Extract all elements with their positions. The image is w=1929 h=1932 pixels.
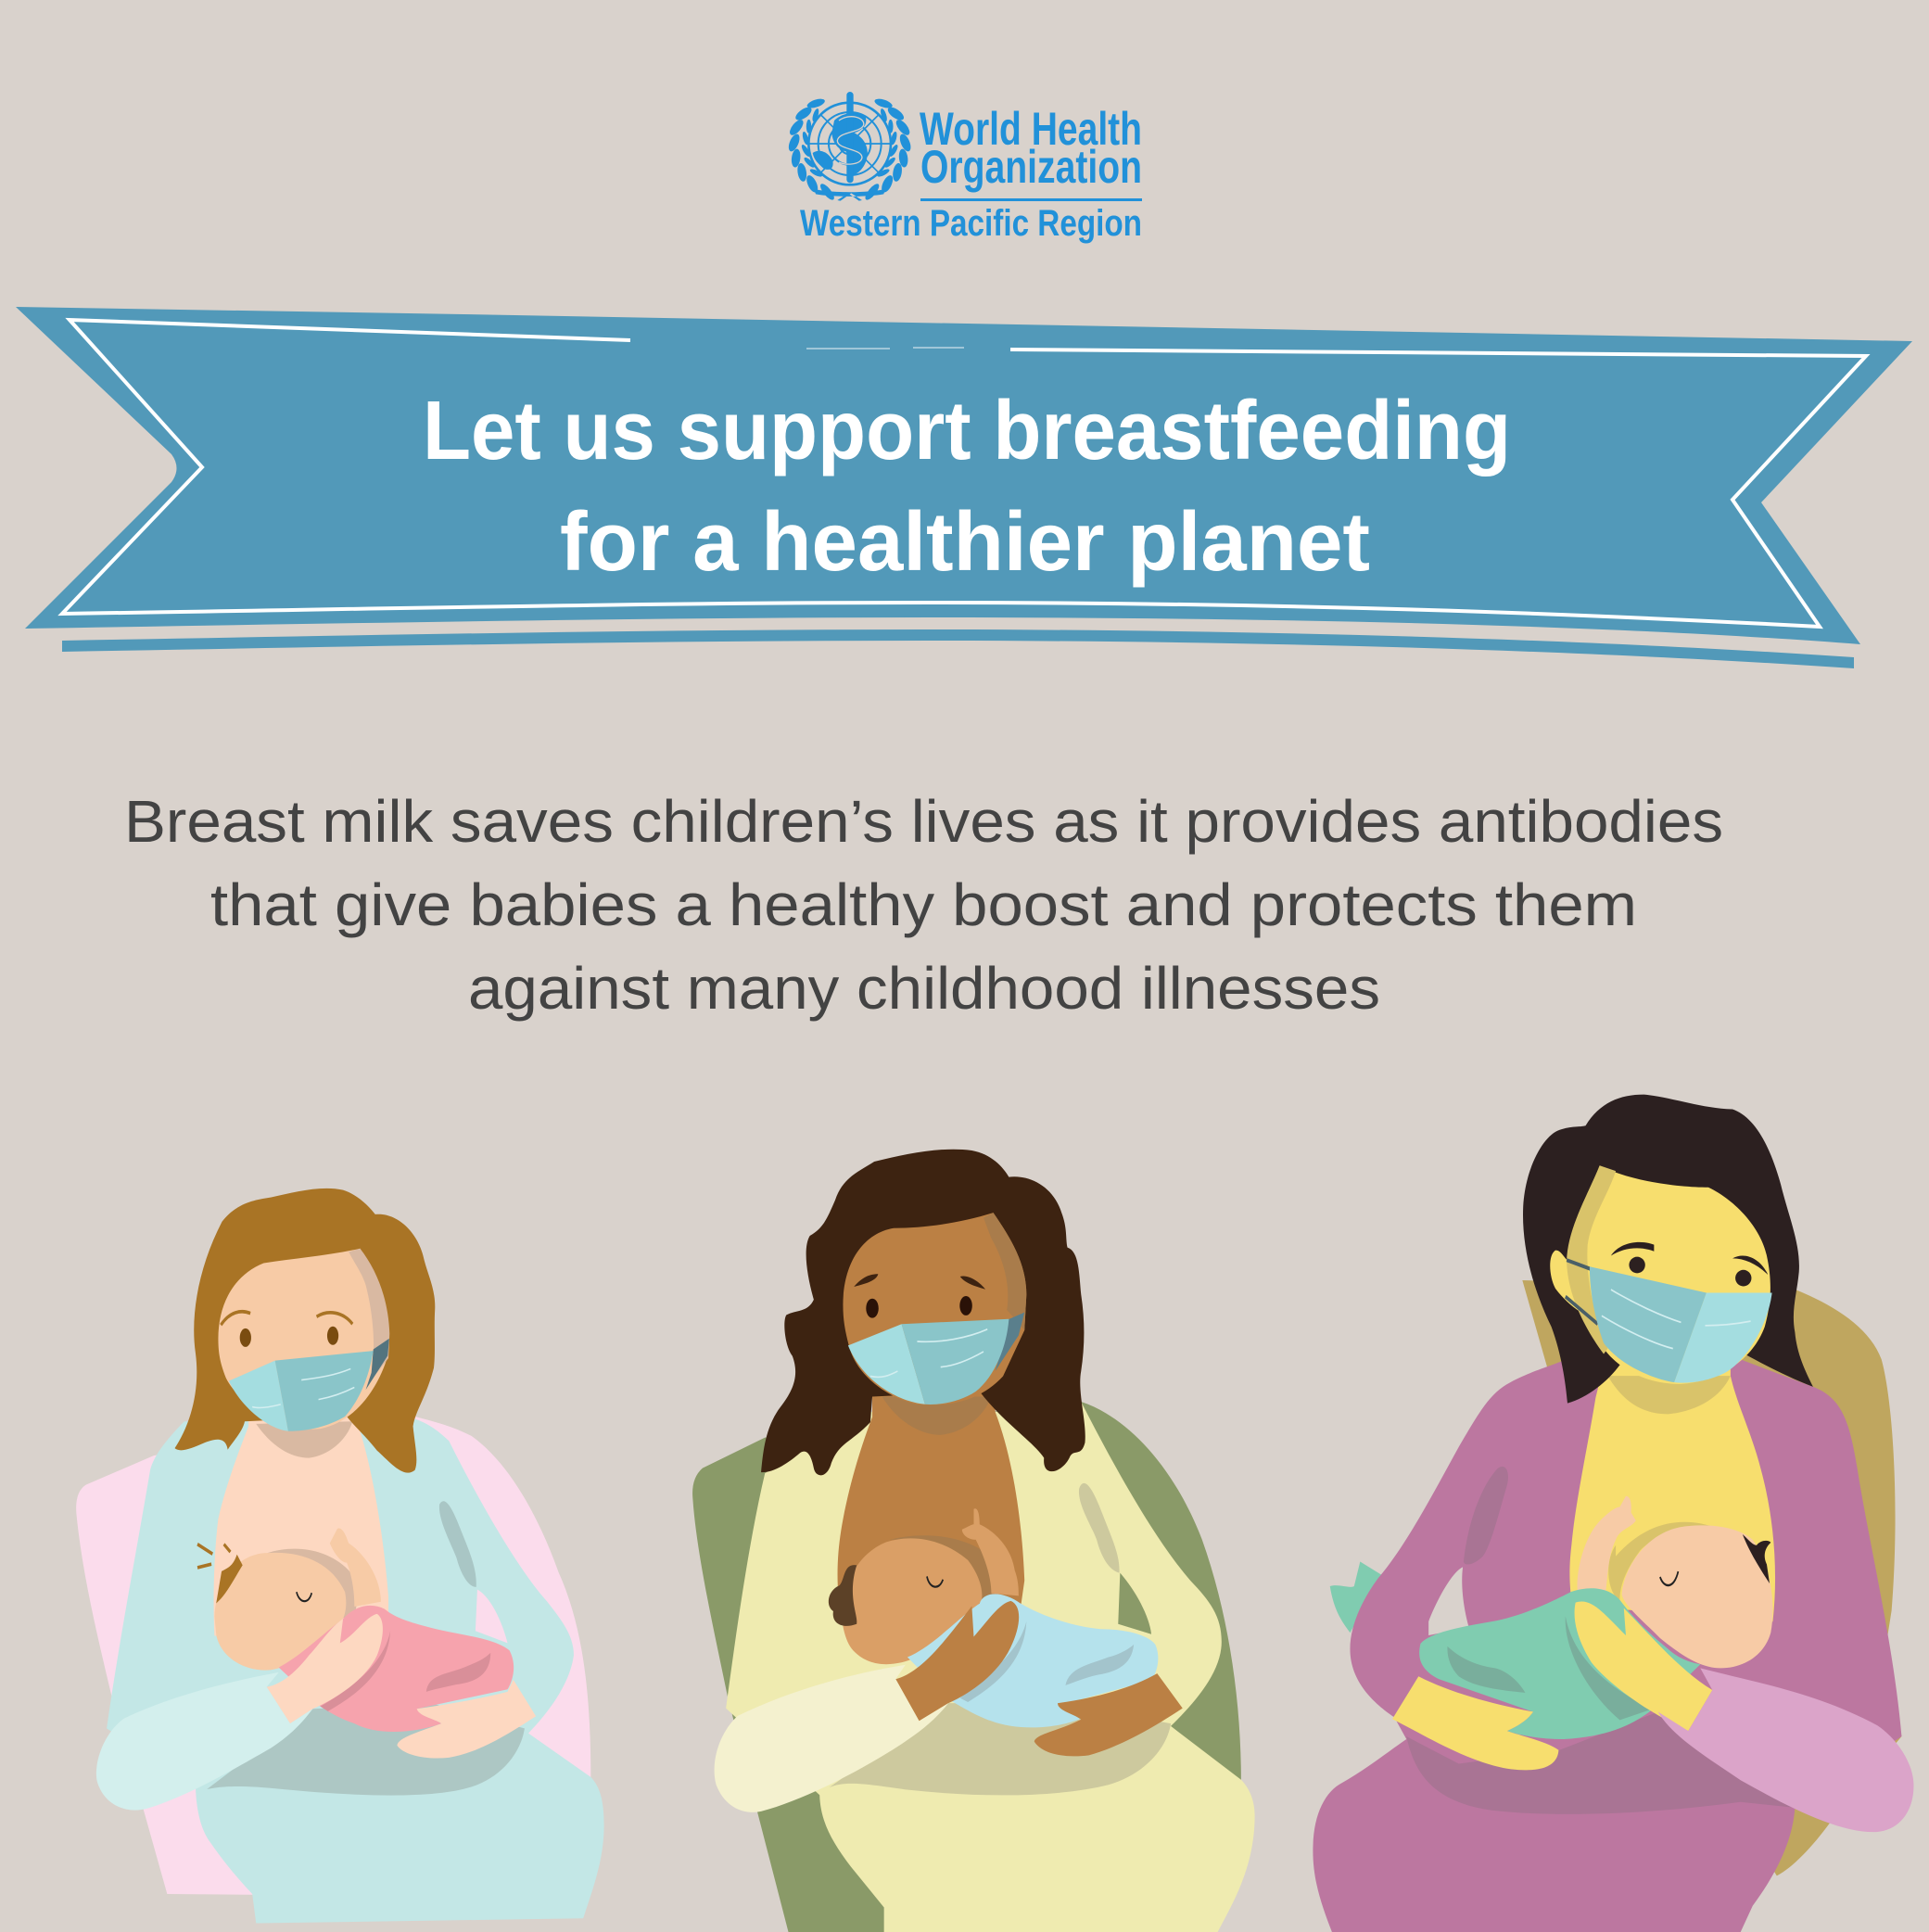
mint cardigan and lap [107, 1419, 604, 1924]
body text: Breast milk saves children’s lives as it provides antibodies [124, 788, 1723, 855]
baby [197, 1529, 514, 1732]
green chair [692, 1402, 1241, 1932]
banner [16, 307, 1912, 668]
pink chair [76, 1417, 590, 1897]
logo text: World Health: World Health [920, 103, 1142, 155]
head [1523, 1095, 1813, 1404]
banner title: for a healthier planet [560, 496, 1370, 589]
mustard chair [1522, 1280, 1901, 1875]
icon: WHO emblem [786, 92, 913, 202]
logo text: Organization: Organization [920, 141, 1142, 193]
lap shadow [830, 1703, 1171, 1795]
WHO Western Pacific Region logo [786, 92, 1142, 244]
logo text: Western Pacific Region: Western Pacific Region [800, 203, 1142, 244]
hands and sleeve [1392, 1602, 1913, 1832]
face mask [848, 1313, 1024, 1405]
blanket tail [1330, 1561, 1382, 1633]
illustration: mother 3, black hair, purple cardigan [1313, 1095, 1913, 1932]
banner underline [62, 629, 1854, 668]
body text: against many childhood illnesses [468, 955, 1380, 1022]
chest [838, 1381, 1024, 1621]
chest [1569, 1349, 1775, 1621]
hands and sleeve [96, 1614, 536, 1811]
body text [124, 788, 1723, 1022]
illustration: mother 2, dark curly hair, cream cardigan [692, 1150, 1255, 1932]
lap shadow [1406, 1712, 1793, 1814]
purple cardigan and lap [1313, 1359, 1901, 1932]
lap shadow [207, 1704, 525, 1796]
chest [214, 1406, 388, 1635]
banner title: Let us support breastfeeding [423, 385, 1511, 477]
head [175, 1188, 435, 1473]
face mask [229, 1339, 389, 1431]
body text: that give babies a healthy boost and protects them [210, 871, 1637, 938]
pink blanket [279, 1606, 514, 1732]
green blanket [1419, 1588, 1700, 1739]
head [761, 1150, 1085, 1475]
face mask [1566, 1260, 1772, 1383]
baby [1419, 1496, 1772, 1739]
cream cardigan and lap [726, 1402, 1255, 1932]
banner title [423, 385, 1511, 589]
illustration: mother 1, light hair, mint cardigan [76, 1188, 604, 1924]
banner ribbon shape [16, 307, 1912, 644]
baby [829, 1508, 1158, 1727]
hands and sleeve [715, 1601, 1183, 1812]
blue blanket [907, 1594, 1158, 1727]
